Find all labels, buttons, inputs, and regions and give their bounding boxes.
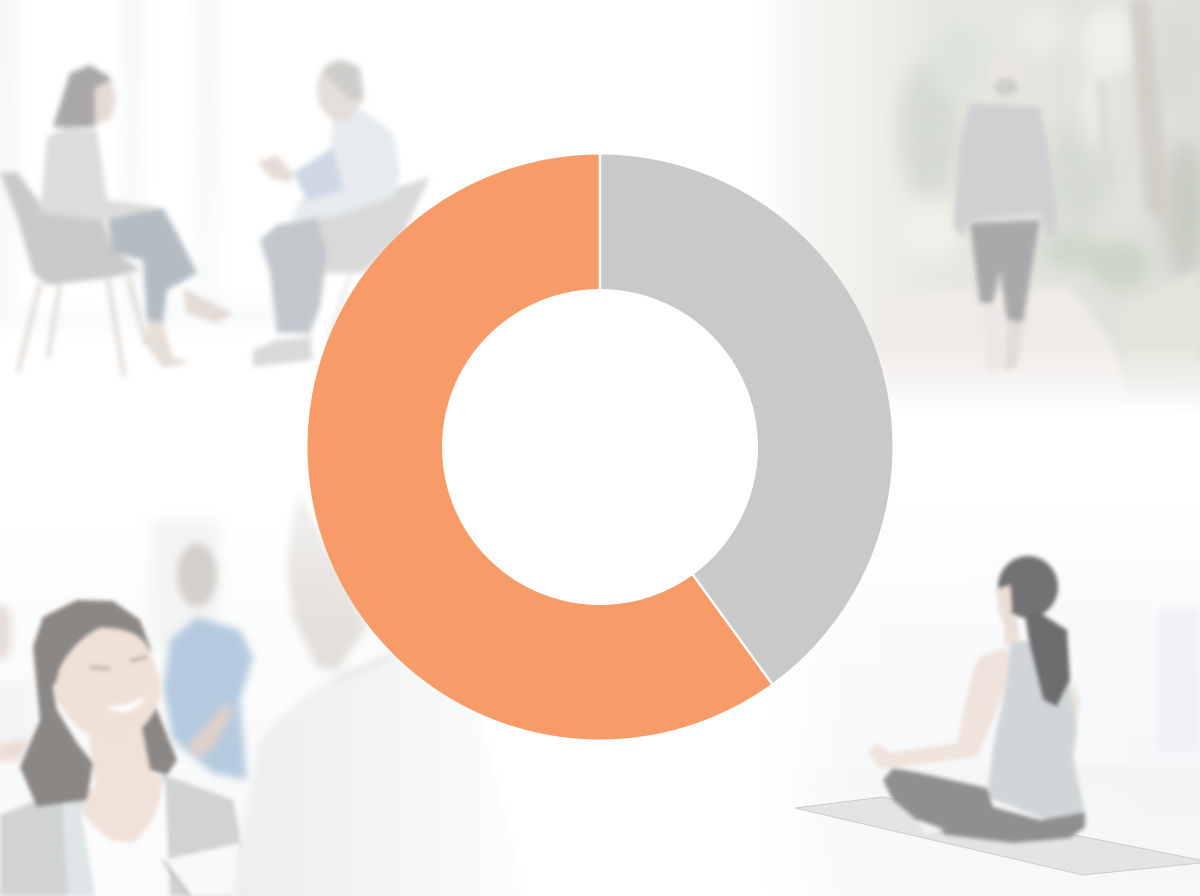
- segment: gray 40%: [600, 154, 892, 684]
- face: [54, 628, 161, 741]
- legs: [883, 768, 1085, 843]
- tank top: [987, 640, 1085, 820]
- yoga mat: [795, 797, 1200, 875]
- segment: orange 60%: [307, 154, 772, 740]
- man's shirt: [290, 110, 400, 220]
- walking woman: [953, 50, 1057, 372]
- photo: counseling session: [0, 0, 430, 420]
- hair: [998, 556, 1058, 618]
- hair: [20, 600, 177, 807]
- photo: clinic conversation: [0, 493, 530, 896]
- chair: [0, 172, 140, 285]
- photo: forest walk: [750, 0, 1200, 432]
- man's chair: [317, 177, 430, 273]
- smiling woman: [0, 600, 242, 896]
- separator at top: [599, 154, 601, 289]
- background nurse: [163, 543, 253, 780]
- woman's hair and face: [53, 65, 113, 127]
- seated woman: [868, 556, 1085, 843]
- man's head: [317, 59, 363, 121]
- white top: [80, 780, 170, 896]
- far arm: [1068, 680, 1080, 755]
- neck and chest: [80, 725, 163, 843]
- separator at lower right: [693, 575, 772, 684]
- background person left: [0, 604, 34, 762]
- near arm: [868, 647, 1010, 768]
- cardigan: [0, 775, 242, 896]
- doctor seen from behind: [233, 493, 530, 896]
- woman's trousers: [107, 208, 197, 323]
- man's trousers: [260, 217, 327, 333]
- woman's torso: [40, 127, 160, 220]
- neck and face: [998, 590, 1020, 645]
- donut chart: [307, 154, 892, 740]
- woman's feet: [183, 287, 233, 323]
- photo: yoga meditation: [760, 500, 1200, 896]
- clipboard: [163, 843, 240, 896]
